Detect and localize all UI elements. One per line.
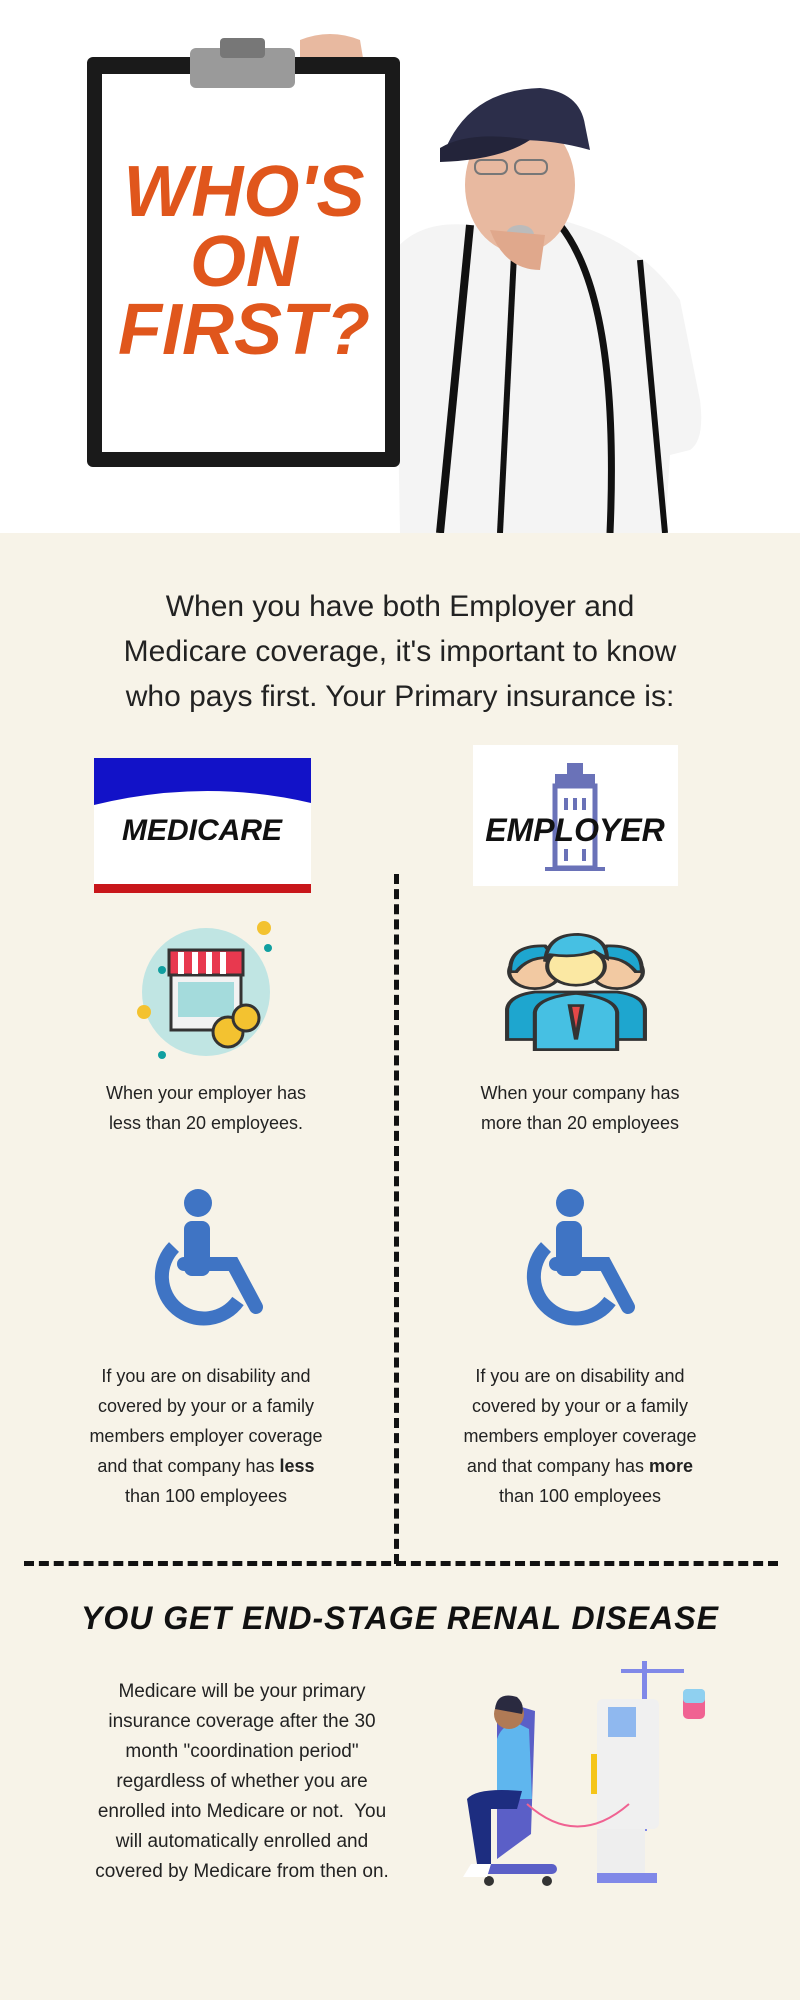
icon: wheelchair right: [526, 1189, 635, 1326]
horizontal dashed divider: [24, 1561, 778, 1566]
icon: wheelchair left: [154, 1189, 263, 1326]
text block: renal paragraph: enrolled into Medicare or not. You: [98, 1801, 386, 1822]
text block: renal paragraph: insurance coverage after the 30: [108, 1711, 376, 1732]
vertical dashed divider: [394, 874, 399, 1564]
clipboard: [87, 38, 400, 467]
intro text: When you have both Employer and: [166, 590, 634, 623]
logo: medicare: [94, 758, 311, 893]
text block: company more than 20: more than 20 employees: [481, 1113, 679, 1133]
text block: employer less than 20: When your employer has: [106, 1083, 306, 1103]
text block: disability more than 100: members employer coverage: [463, 1426, 697, 1446]
text block: disability less than 100: covered by your or a family: [98, 1396, 314, 1416]
intro text: Medicare coverage, it's important to know: [124, 635, 676, 668]
clipboard: ON: [190, 222, 300, 302]
text block: renal paragraph: covered by Medicare from then on.: [95, 1861, 389, 1882]
intro text: [124, 590, 676, 713]
referee man: [300, 34, 701, 533]
icon: team of employees: [505, 933, 647, 1051]
logo: medicare: MEDICARE: [122, 814, 283, 847]
logo: employer: [473, 745, 678, 886]
heading: end-stage renal disease: YOU GET END-STAGE RENAL DISEASE: [81, 1600, 719, 1636]
text block: disability less than 100: members employer coverage: [89, 1426, 323, 1446]
icon: shop with coins: [137, 921, 272, 1059]
text block: disability more than 100: If you are on disability and: [475, 1366, 685, 1386]
clipboard: FIRST?: [118, 290, 370, 370]
illustration: dialysis patient: [463, 1661, 705, 1886]
text block: disability more than 100: than 100 employees: [499, 1486, 661, 1506]
text block: disability more than 100: and that company has more: [467, 1456, 693, 1476]
text block: disability less than 100: If you are on disability and: [101, 1366, 311, 1386]
text block: renal paragraph: Medicare will be your primary: [118, 1681, 366, 1702]
text block: disability more than 100: covered by your or a family: [472, 1396, 688, 1416]
text block: renal paragraph: [95, 1681, 389, 1882]
logo: employer: EMPLOYER: [485, 812, 665, 848]
text block: disability less than 100: and that company has less: [97, 1456, 315, 1476]
text block: disability more than 100: [463, 1366, 697, 1506]
text block: employer less than 20: less than 20 employees.: [109, 1113, 303, 1133]
text block: renal paragraph: month "coordination period": [125, 1741, 359, 1762]
text block: renal paragraph: will automatically enrolled and: [116, 1831, 368, 1852]
text block: employer less than 20: [106, 1083, 306, 1133]
text block: company more than 20: When your company has: [480, 1083, 680, 1103]
text block: disability less than 100: than 100 employees: [125, 1486, 287, 1506]
text block: renal paragraph: regardless of whether you are: [116, 1771, 368, 1792]
clipboard title: WHO'S: [123, 152, 365, 232]
intro text: who pays first. Your Primary insurance is:: [126, 680, 674, 713]
text block: disability less than 100: [89, 1366, 323, 1506]
hero photo panel: [0, 0, 800, 533]
text block: company more than 20: [480, 1083, 680, 1133]
